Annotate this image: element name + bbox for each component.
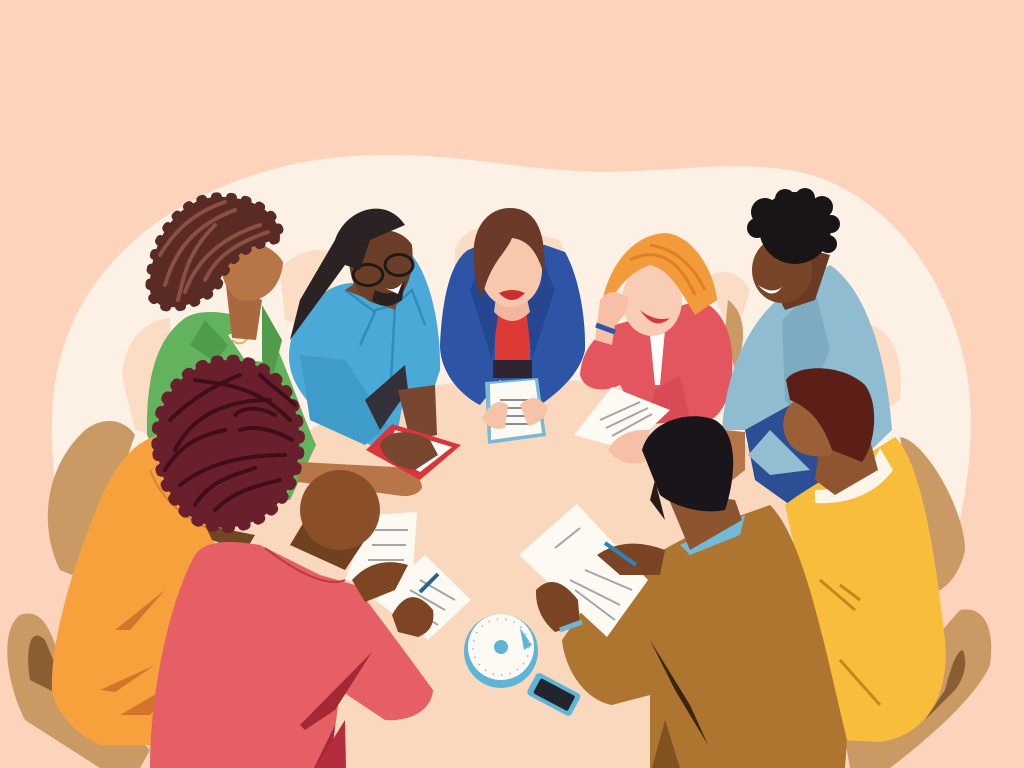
person: woman in orange top, back view	[52, 360, 299, 745]
paper: held document right	[519, 504, 648, 637]
chair: left front	[48, 421, 135, 580]
person: man with glasses and blue shirt	[289, 209, 440, 445]
arm over right paper	[608, 430, 650, 464]
paper: red clipboard	[366, 424, 461, 480]
paper: right document	[574, 387, 670, 450]
afro hair	[747, 188, 840, 264]
chair: back right wooden	[725, 300, 743, 370]
chair: right lower	[845, 609, 991, 768]
timer dial	[464, 614, 538, 688]
person: man in yellow sweater	[783, 368, 946, 742]
hands on centre document	[482, 398, 548, 429]
back chair shapes	[122, 226, 901, 440]
person: woman with orange hair and red jacket	[580, 233, 733, 425]
person: man in coral shirt, back view	[150, 470, 433, 768]
smartphone	[526, 672, 582, 717]
sleeve cuff	[560, 622, 582, 630]
person: man in light blue shirt	[722, 188, 892, 505]
hand on clipboard	[380, 432, 438, 470]
paper: centre document	[485, 378, 546, 444]
cream blob backdrop	[52, 155, 971, 520]
pen: dark blue	[420, 574, 438, 592]
chair: far left	[7, 613, 150, 768]
papers: left documents	[345, 512, 471, 640]
person: woman in navy blazer	[440, 208, 585, 405]
pen: blue	[605, 543, 636, 565]
table	[200, 378, 831, 768]
person: man in brown jacket, back view	[562, 416, 847, 768]
person: woman with curly hair and green blazer	[147, 197, 422, 500]
hands holding document	[536, 544, 665, 632]
chair: right upper	[900, 437, 965, 595]
